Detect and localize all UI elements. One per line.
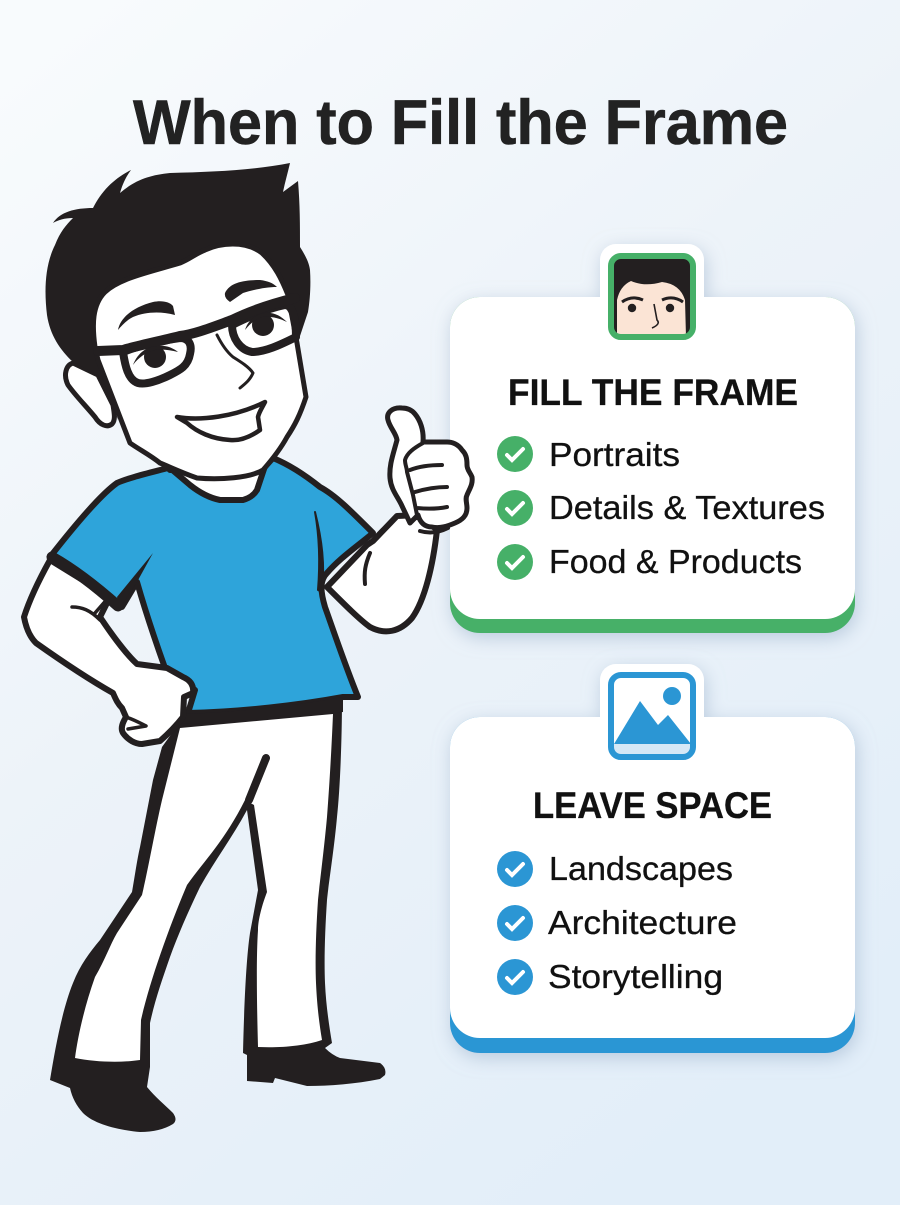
list item: food and products: Food & Products <box>549 543 802 580</box>
panel: leave space <box>450 664 855 1053</box>
list item: portraits <box>497 436 680 473</box>
panel: fill the frame <box>450 244 855 633</box>
list item: storytelling: Storytelling <box>548 958 723 995</box>
list item: portraits: Portraits <box>549 436 680 473</box>
card body with green base <box>450 244 855 633</box>
glasses <box>98 298 296 384</box>
nose <box>217 335 253 388</box>
title: When to Fill the Frame <box>133 88 788 158</box>
face <box>93 244 306 479</box>
blue t-shirt <box>50 458 373 724</box>
list item: details and textures: Details & Textures <box>549 489 825 526</box>
icon: portrait face <box>600 244 704 348</box>
eyebrows <box>118 280 277 330</box>
eyes <box>133 313 287 368</box>
heading: fill the frame: FILL THE FRAME <box>508 372 798 413</box>
right arm and thumbs-up hand <box>327 408 472 631</box>
card body with blue base <box>450 664 855 1053</box>
neck <box>170 466 265 500</box>
left arm and fist <box>24 557 193 744</box>
character: man giving thumbs up <box>24 163 472 1132</box>
smile <box>177 402 265 440</box>
trousers and shoes <box>50 697 385 1132</box>
icon: landscape picture <box>600 664 704 768</box>
hair <box>46 163 310 420</box>
ear <box>66 363 114 426</box>
heading: leave space: LEAVE SPACE <box>533 785 772 826</box>
list item: landscapes: Landscapes <box>549 850 733 887</box>
list item: architecture: Architecture <box>548 904 737 941</box>
